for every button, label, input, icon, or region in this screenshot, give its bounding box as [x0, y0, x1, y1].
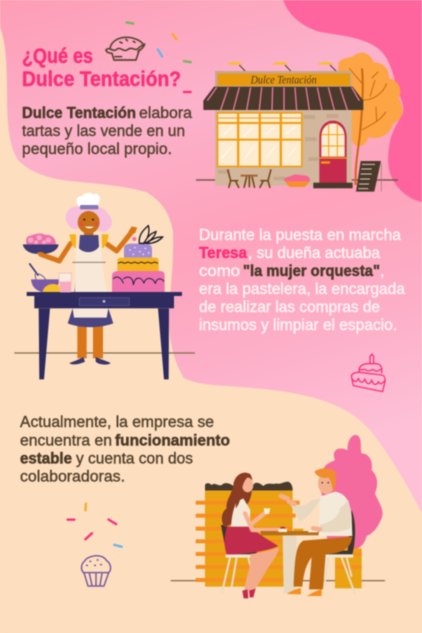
illustration: couple at cafe table: [171, 435, 385, 598]
line 4: era la pastelera, la encargada: [199, 281, 405, 298]
icon: muffin: [82, 556, 111, 586]
woman's arm: [245, 512, 278, 530]
chef hair: [66, 206, 112, 232]
chef shoes: [69, 357, 111, 365]
man's sweater: [318, 492, 352, 536]
cake slice and plates: [278, 527, 318, 532]
man's chair: [324, 510, 355, 594]
flower basket: [284, 175, 310, 187]
mixing bowl and whisk: [29, 263, 61, 292]
pink plant: [320, 435, 383, 549]
intro paragraph: [22, 105, 192, 158]
chef legs: [77, 323, 103, 358]
chef arms: [41, 232, 132, 261]
woman's top: [231, 498, 250, 527]
hedge: [205, 482, 293, 491]
table: [27, 292, 182, 379]
table pedestal: [283, 535, 297, 593]
lamps: [229, 62, 338, 73]
tree: [337, 53, 402, 185]
chef face: [78, 211, 100, 238]
layered cake: [112, 226, 165, 292]
woman's face: [242, 478, 253, 492]
line 3 end: y cuenta con dos: [76, 450, 193, 468]
title: [22, 45, 181, 91]
man's legs: [294, 537, 352, 589]
sign name: Dulce Tentación: [250, 75, 317, 87]
woman's hair front: [236, 474, 250, 508]
highlighted name: Teresa: [199, 245, 247, 262]
line 3: pequeño local propio.: [22, 141, 172, 158]
line 1: Durante la puesta en marcha: [199, 227, 401, 244]
man's face: [318, 473, 335, 494]
sprinkles: top: [126, 22, 192, 92]
comma: ,: [380, 263, 384, 280]
line 6: insumos y limpiar el espacio.: [199, 317, 397, 334]
chef hand fingers: [128, 226, 137, 233]
table top: [261, 531, 319, 535]
background: dark pink corner blob: [283, 0, 422, 202]
woman's hair back: [222, 473, 252, 527]
ground line: [196, 179, 398, 181]
illustration: storefront: [196, 53, 402, 192]
orange fence: [196, 491, 362, 588]
line 4: colaboradoras.: [20, 468, 125, 486]
menu board: [356, 161, 381, 192]
middle paragraph: [199, 227, 405, 334]
man's shoes: [287, 588, 322, 596]
illustration: chef with cake at table: [14, 193, 195, 379]
bold lead: Dulce Tentación: [22, 105, 136, 122]
table drawer: [79, 298, 129, 306]
bold phrase part 2: estable: [20, 450, 72, 468]
ground line: [14, 352, 195, 354]
building wall: [215, 108, 352, 186]
highlighted phrase: "la mujer orquesta": [243, 263, 380, 280]
man's hair: [314, 468, 336, 492]
woman's chair: [221, 525, 257, 594]
line 1: Actualmente, la empresa se: [20, 414, 214, 431]
woman's shoes: [242, 589, 256, 598]
shop sign: [215, 71, 352, 87]
cup: [264, 508, 270, 514]
icon: birthday cake: [351, 354, 385, 392]
bowl of berries: [23, 233, 59, 257]
apron: [73, 243, 108, 318]
bottom paragraph: [20, 414, 230, 486]
chef dress: [68, 234, 113, 327]
sprinkles: bottom: [67, 503, 123, 547]
woman's legs: [244, 547, 279, 591]
awning: [203, 87, 363, 110]
line 2: tartas y las vende en un: [22, 123, 185, 140]
door: [313, 121, 353, 188]
bold phrase part 1: funcionamiento: [115, 432, 230, 450]
shop window: [217, 112, 303, 167]
chef hat: [77, 193, 100, 209]
ground line: [171, 580, 385, 581]
line 3 start: como: [199, 263, 240, 280]
glass of milk: [59, 273, 72, 292]
icon: pie: [106, 37, 145, 60]
man's sleeve: [290, 498, 351, 532]
cafe table and chairs: [228, 169, 271, 188]
man's hands and fork: [281, 496, 320, 529]
title line 2: Dulce Tentación?: [22, 68, 181, 91]
line 1 end: elabora: [139, 105, 192, 122]
woman's skirt: [225, 527, 278, 554]
line 2 end: , su dueña actuaba: [248, 245, 380, 262]
line 5: de realizar las compras de: [199, 299, 380, 316]
wall bricks: [218, 114, 338, 180]
line 2 start: encuentra en: [20, 432, 112, 450]
apron tie: [73, 261, 105, 264]
title line 1: ¿Qué es: [22, 45, 93, 68]
